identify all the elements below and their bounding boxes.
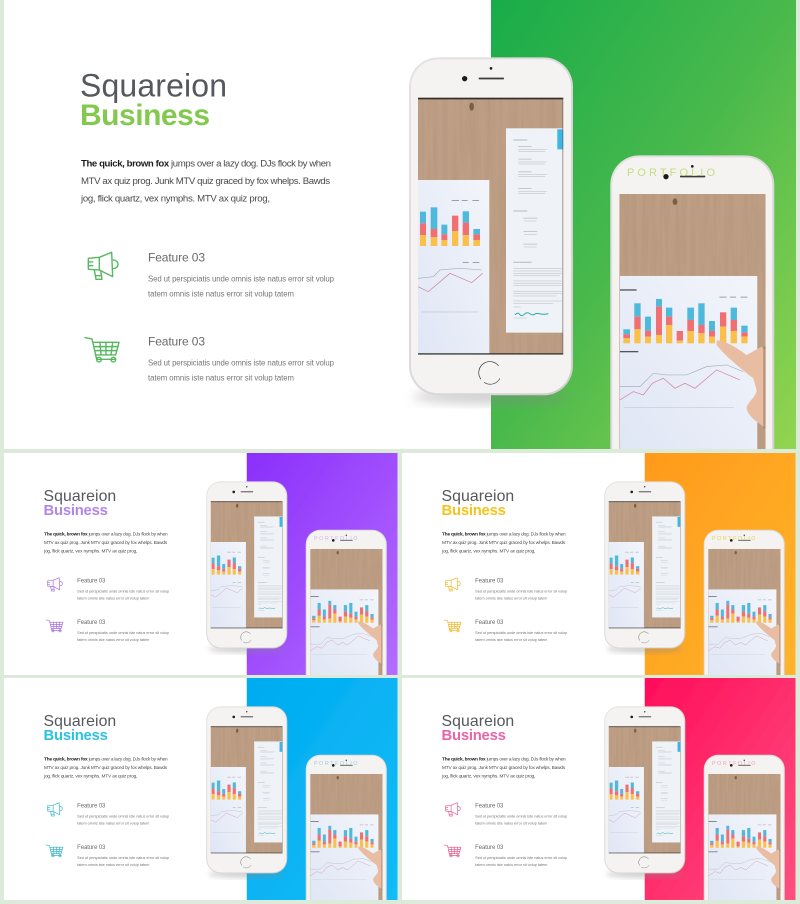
intro paragraph: [441, 756, 566, 780]
title: Squareion: [44, 713, 116, 730]
intro paragraph: [80, 158, 331, 205]
portfolio label: PORTFOLIO: [627, 167, 715, 179]
feature 1: Feature 03: [475, 578, 504, 584]
feature 2: tatem omnis iste natus error sit volup tatem: [77, 863, 149, 867]
icon: megaphone: [446, 578, 460, 591]
feature 1: [77, 803, 169, 826]
feature 1: Sed ut perspiciatis unde omnis iste natus error sit volup: [77, 814, 169, 818]
portfolio label: PORTFOLIO: [314, 536, 357, 542]
feature 2: [148, 335, 335, 383]
panel: purple slide: [4, 453, 398, 697]
feature 1: Sed ut perspiciatis unde omnis iste natus error sit volup: [77, 589, 169, 593]
phones with charts: [604, 481, 785, 697]
feature 1: tatem omnis iste natus error sit volup tatem: [475, 597, 547, 601]
icon: shopping cart: [444, 845, 461, 857]
intro paragraph: The quick, brown fox jumps over a lazy dog. DJs flock by when: [44, 531, 168, 537]
intro paragraph: The quick, brown fox jumps over a lazy dog. DJs flock by when: [81, 158, 331, 170]
feature 2: Feature 03: [77, 620, 106, 626]
feature 2: [475, 845, 567, 867]
title: Business: [442, 728, 506, 744]
orange gradient panel: [645, 453, 796, 675]
icon: shopping cart: [46, 620, 63, 632]
intro paragraph: MTV ax quiz prog. Junk MTV quiz graced by fox whelps. Bawds: [442, 540, 566, 546]
feature 1: tatem omnis iste natus error sit volup tatem: [77, 597, 149, 601]
feature 2: tatem omnis iste natus error sit volup tatem: [148, 374, 294, 383]
feature 2: Sed ut perspiciatis unde omnis iste natus error sit volup: [77, 856, 169, 860]
feature 2: Feature 03: [475, 620, 504, 626]
title: Business: [44, 728, 108, 744]
intro paragraph: The quick, brown fox jumps over a lazy dog. DJs flock by when: [442, 756, 566, 762]
feature 2: Sed ut perspiciatis unde omnis iste natus error sit volup: [77, 631, 169, 635]
icon: shopping cart: [85, 338, 119, 362]
title: [442, 713, 514, 744]
portfolio label: PORTFOLIO: [712, 536, 755, 542]
feature 2: Feature 03: [148, 335, 205, 349]
title: Business: [80, 99, 210, 132]
feature 1: Feature 03: [77, 803, 106, 809]
intro paragraph: [43, 531, 168, 555]
phones with charts: [409, 57, 774, 449]
title: [442, 490, 514, 515]
intro paragraph: jog, flick quartz, vex nymphs. MTV ax quiz prog,: [80, 194, 270, 205]
icon: megaphone: [48, 803, 62, 816]
intro paragraph: jog, flick quartz, vex nymphs. MTV ax quiz prog,: [43, 774, 137, 780]
purple gradient panel: [247, 453, 398, 675]
feature 2: tatem omnis iste natus error sit volup tatem: [475, 638, 547, 642]
title: [44, 490, 116, 515]
icon: megaphone: [88, 252, 118, 279]
feature 1: Feature 03: [77, 578, 106, 584]
green gradient panel: [491, 0, 796, 449]
feature 1: Sed ut perspiciatis unde omnis iste natus error sit volup: [148, 275, 335, 284]
cyan gradient panel: [247, 678, 398, 900]
feature 2: [77, 845, 169, 867]
intro paragraph: MTV ax quiz prog. Junk MTV quiz graced by fox whelps. Bawds: [81, 176, 330, 187]
panel: pink slide: [402, 678, 796, 904]
feature 1: Feature 03: [475, 803, 504, 809]
icon: shopping cart: [444, 620, 461, 632]
feature 2: tatem omnis iste natus error sit volup tatem: [475, 863, 547, 867]
intro paragraph: The quick, brown fox jumps over a lazy dog. DJs flock by when: [44, 756, 168, 762]
panel: main green slide: [4, 0, 800, 493]
title: Squareion: [44, 488, 116, 505]
feature 1: tatem omnis iste natus error sit volup tatem: [77, 822, 149, 826]
intro paragraph: jog, flick quartz, vex nymphs. MTV ax quiz prog,: [441, 549, 535, 555]
title: Business: [442, 503, 506, 519]
intro paragraph: MTV ax quiz prog. Junk MTV quiz graced by fox whelps. Bawds: [44, 765, 168, 771]
intro paragraph: MTV ax quiz prog. Junk MTV quiz graced by fox whelps. Bawds: [442, 765, 566, 771]
portfolio label: PORTFOLIO: [712, 761, 755, 767]
feature 2: Feature 03: [77, 845, 106, 851]
feature 1: Feature 03: [148, 251, 205, 265]
feature 1: tatem omnis iste natus error sit volup tatem: [475, 822, 547, 826]
feature 1: [77, 578, 169, 601]
panel: orange slide: [402, 453, 796, 697]
panel: cyan slide: [4, 678, 398, 904]
icon: shopping cart: [46, 845, 63, 857]
feature 2: Sed ut perspiciatis unde omnis iste natus error sit volup: [475, 631, 567, 635]
title: Squareion: [80, 68, 227, 104]
title: Business: [44, 503, 108, 519]
title: [82, 73, 225, 126]
title: Squareion: [442, 488, 514, 505]
intro paragraph: [441, 531, 566, 555]
feature 2: tatem omnis iste natus error sit volup tatem: [77, 638, 149, 642]
feature 1: [475, 578, 567, 601]
feature 2: Feature 03: [475, 845, 504, 851]
icon: megaphone: [446, 803, 460, 816]
feature 1: tatem omnis iste natus error sit volup tatem: [148, 290, 294, 299]
intro paragraph: MTV ax quiz prog. Junk MTV quiz graced by fox whelps. Bawds: [44, 540, 168, 546]
feature 1: Sed ut perspiciatis unde omnis iste natus error sit volup: [475, 814, 567, 818]
feature 2: [475, 620, 567, 642]
title: Squareion: [442, 713, 514, 730]
phones with charts: [206, 706, 387, 904]
intro paragraph: [43, 756, 168, 780]
phones with charts: [206, 481, 387, 697]
portfolio label: PORTFOLIO: [314, 761, 357, 767]
feature 1: Sed ut perspiciatis unde omnis iste natus error sit volup: [475, 589, 567, 593]
feature 1: [148, 251, 335, 299]
intro paragraph: The quick, brown fox jumps over a lazy dog. DJs flock by when: [442, 531, 566, 537]
intro paragraph: jog, flick quartz, vex nymphs. MTV ax quiz prog,: [441, 774, 535, 780]
feature 2: [77, 620, 169, 642]
feature 2: Sed ut perspiciatis unde omnis iste natus error sit volup: [148, 359, 335, 368]
title: [44, 714, 116, 740]
phones with charts: [604, 706, 785, 904]
icon: megaphone: [48, 578, 62, 591]
intro paragraph: jog, flick quartz, vex nymphs. MTV ax quiz prog,: [43, 549, 137, 555]
pink gradient panel: [645, 678, 796, 900]
feature 2: Sed ut perspiciatis unde omnis iste natus error sit volup: [475, 856, 567, 860]
feature 1: [475, 803, 567, 826]
